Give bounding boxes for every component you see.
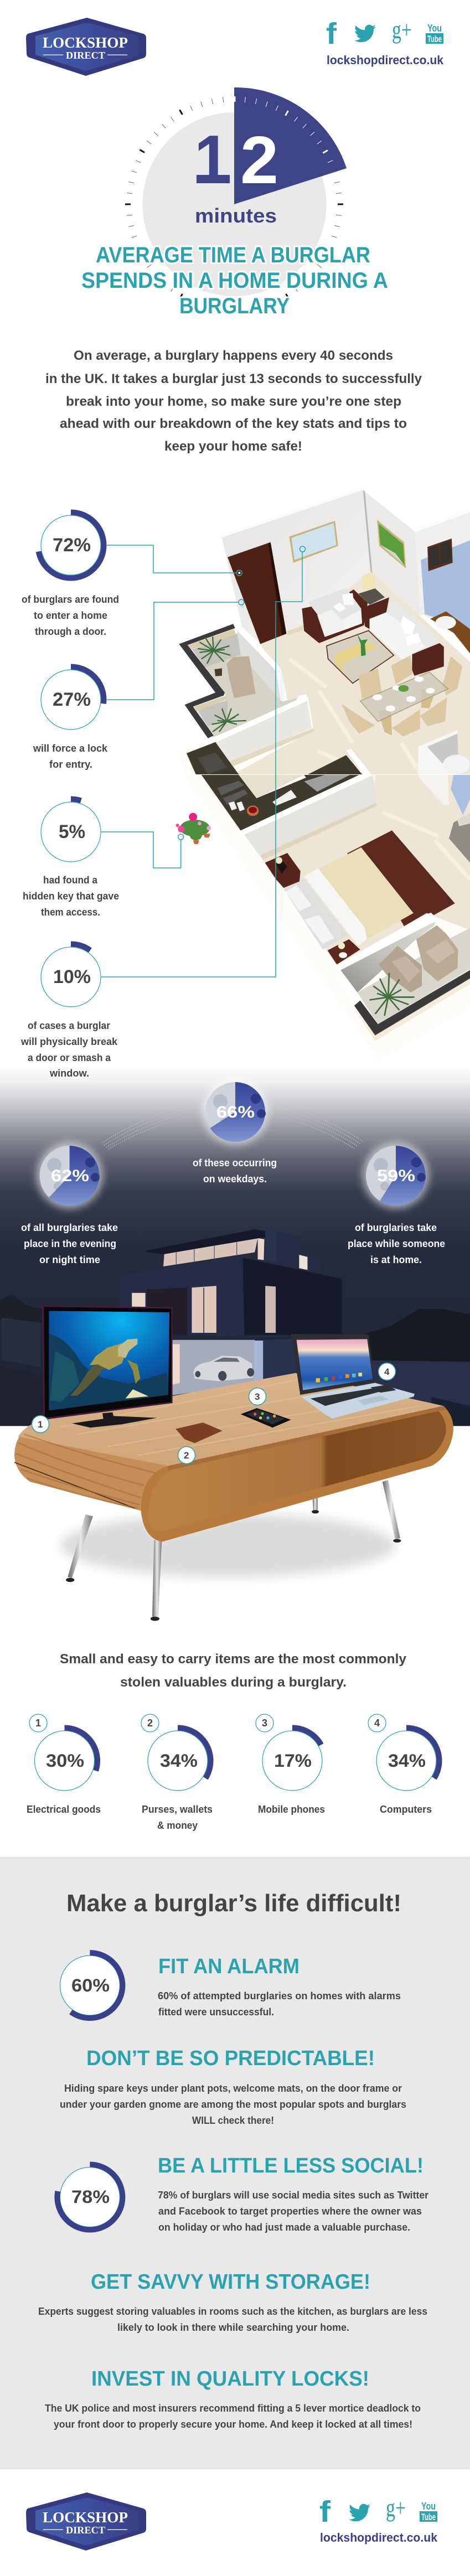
tip: fit an alarm: 60% of attempted burglaries on homes with alarms xyxy=(158,1990,401,2001)
tip: don't be so predictable: under your garden gnome are among the most popular spots and burglars xyxy=(60,2099,406,2110)
tip: be less social: 78% xyxy=(71,2187,110,2207)
stat: 10%: a door or smash a xyxy=(28,1052,111,1063)
bathroom xyxy=(418,611,470,774)
tip: be less social: on holiday or who had just made a valuable purchase. xyxy=(158,2222,410,2233)
sofas and lamp xyxy=(302,573,444,676)
valuables heading: stolen valuables during a burglary. xyxy=(120,1675,347,1690)
stat: 5%: had found a xyxy=(43,875,98,886)
website url: lockshopdirect.co.uk xyxy=(327,53,444,67)
tip: don't be so predictable: DON’T BE SO PREDICTABLE! xyxy=(86,2047,375,2070)
tip: storage: likely to look in there while searching your home. xyxy=(117,2322,349,2333)
door xyxy=(228,542,286,644)
laptop xyxy=(291,1334,415,1419)
panel: tips xyxy=(0,1857,470,2469)
number 12: 1 xyxy=(194,122,230,198)
item markers on table: 4 xyxy=(384,1367,390,1377)
table legs xyxy=(66,1480,401,1621)
tip: quality locks: your front door to properly secure your home. And keep it locked at all times! xyxy=(54,2419,412,2430)
stat: computers 34%: Computers xyxy=(380,1804,432,1815)
stat: 59% moon: of burglaries take xyxy=(355,1222,437,1233)
stat: mobile phones 17% xyxy=(256,1714,326,1815)
stat: 10%: will physically break xyxy=(20,1036,118,1047)
tv xyxy=(42,1305,173,1427)
illustration: apartment floor plan xyxy=(176,486,470,1061)
tip: quality locks: The UK police and most insurers recommend fitting a 5 lever mortice deadlock to xyxy=(45,2403,421,2414)
stat: 72% xyxy=(22,513,119,637)
intro paragraph: On average, a burglary happens every 40 seconds xyxy=(74,348,393,363)
stat: 5%: hidden key that gave xyxy=(23,891,119,902)
stat: 72%: to enter a home xyxy=(34,610,107,621)
stat: 59% moon: 59% xyxy=(377,1167,415,1185)
table body xyxy=(14,1373,453,1542)
bathroom corner and tv unit xyxy=(419,775,470,863)
title: BURGLARY xyxy=(179,294,290,318)
tip: fit an alarm: 60% xyxy=(71,1975,110,1995)
stat: 66% moon: on weekdays. xyxy=(203,1173,267,1184)
tip: storage: Experts suggest storing valuables in rooms such as the kitchen, as burglars are less xyxy=(38,2306,427,2317)
walls xyxy=(214,486,470,644)
tip: be less social: 78% of burglars will use social media sites such as Twitter xyxy=(158,2190,428,2201)
stat: 59% moon: is at home. xyxy=(370,1254,422,1265)
header logo xyxy=(26,18,146,76)
number 12: 2 xyxy=(240,122,278,198)
icon: youtube: You xyxy=(421,2501,436,2512)
clock graphic: 12 minutes xyxy=(125,87,347,299)
stat: electrical goods 30% xyxy=(27,1714,101,1815)
stat: 62% moon: place in the evening xyxy=(24,1238,116,1249)
item markers on table: 2 xyxy=(184,1450,189,1461)
stat: purses 34%: 34% xyxy=(160,1751,198,1771)
stat: 59% moon: place while someone xyxy=(348,1238,445,1249)
item markers on table: 1 xyxy=(38,1419,43,1430)
stat: electrical goods 30%: Electrical goods xyxy=(27,1804,101,1815)
icon: twitter xyxy=(349,2504,370,2521)
armchairs xyxy=(416,925,458,981)
lower half of plan xyxy=(176,775,470,1061)
stat: 5% xyxy=(23,799,119,918)
intro paragraph xyxy=(45,348,422,454)
icon: facebook: f xyxy=(326,17,337,50)
stat: mobile phones 17%: 17% xyxy=(274,1751,312,1771)
stat: 62% moon xyxy=(21,1142,118,1265)
house illustration xyxy=(0,1228,470,1426)
connector lines from stats to plan xyxy=(101,545,306,977)
stat: 66% moon: 66% xyxy=(216,1103,255,1121)
tip: be less social: BE A LITTLE LESS SOCIAL! xyxy=(158,2154,423,2177)
stat: 5%: 5% xyxy=(59,821,85,842)
stat: 72%: 72% xyxy=(53,535,91,556)
stat: mobile phones 17%: 3 xyxy=(262,1718,267,1729)
balconies xyxy=(179,624,298,738)
valuables heading xyxy=(60,1652,407,1690)
stat: 66% moon: of these occurring xyxy=(193,1157,277,1168)
icon: youtube: Tube xyxy=(427,34,442,44)
kitchen wall and counter xyxy=(187,695,371,774)
icon: facebook: f xyxy=(319,2495,331,2528)
tip: storage: GET SAVVY WITH STORAGE! xyxy=(91,2270,370,2294)
header logo: DIRECT xyxy=(66,50,105,61)
stat: 72%: of burglars are found xyxy=(22,594,119,605)
icon: twitter xyxy=(354,25,376,42)
title: AVERAGE TIME A BURGLAR xyxy=(96,243,370,267)
stat: 72%: through a door. xyxy=(35,626,106,637)
title xyxy=(81,243,388,318)
illustration: table with valuables xyxy=(14,1305,453,1621)
bedroom xyxy=(265,830,455,964)
arcs of dots xyxy=(102,1106,363,1149)
tip: be less social: and Facebook to target properties where the owner was xyxy=(158,2206,422,2217)
stat: purses 34% xyxy=(141,1714,213,1831)
tip: quality locks: INVEST IN QUALITY LOCKS! xyxy=(91,2367,369,2391)
kitchen xyxy=(202,775,377,860)
panel: night scene xyxy=(0,1065,470,1426)
coffee table xyxy=(327,630,394,683)
stat: 59% moon xyxy=(348,1142,445,1265)
dining set xyxy=(342,655,462,737)
icon: google plus: g+ xyxy=(386,2494,406,2522)
header logo: LOCKSHOP xyxy=(43,34,128,51)
tip: fit an alarm xyxy=(57,1953,401,2018)
wall pictures xyxy=(289,520,406,568)
valuables heading: Small and easy to carry items are the most commonly xyxy=(60,1652,407,1667)
header social icons xyxy=(326,15,443,50)
stat: 10%: window. xyxy=(49,1068,89,1079)
stat: mobile phones 17%: Mobile phones xyxy=(258,1804,325,1815)
icon: youtube xyxy=(426,23,443,44)
icon: google plus: g+ xyxy=(392,15,412,44)
upper half of plan xyxy=(177,486,470,774)
wallet xyxy=(175,1423,223,1443)
stat: 10% xyxy=(20,944,118,1079)
item markers on table xyxy=(32,1363,395,1463)
stat: 27% xyxy=(33,666,108,770)
floor shadow xyxy=(60,1513,396,1577)
lower balcony xyxy=(337,913,470,1041)
number 12 xyxy=(194,122,278,198)
tip: be less social xyxy=(57,2154,428,2233)
icon: youtube: You xyxy=(427,23,442,34)
stat: 5%: them access. xyxy=(41,907,100,918)
title: SPENDS IN A HOME DURING A xyxy=(81,268,388,293)
plant xyxy=(370,973,414,1016)
tip: don't be so predictable: Hiding spare keys under plant pots, welcome mats, on the door frame or xyxy=(64,2083,402,2094)
minutes label: minutes xyxy=(195,204,277,227)
stat: 62% moon: 62% xyxy=(51,1167,89,1185)
footer website url: lockshopdirect.co.uk xyxy=(320,2531,438,2544)
phone xyxy=(241,1408,291,1427)
intro paragraph: keep your home safe! xyxy=(164,439,302,454)
stat: computers 34%: 4 xyxy=(374,1718,380,1729)
stat: 10%: of cases a burglar xyxy=(28,1020,110,1031)
tip: fit an alarm: FIT AN ALARM xyxy=(158,1955,299,1978)
stat: purses 34%: Purses, wallets xyxy=(142,1804,213,1815)
stat: 27%: for entry. xyxy=(49,759,92,770)
stat: computers 34% xyxy=(368,1714,440,1815)
tips heading: Make a burglar’s life difficult! xyxy=(66,1890,401,1917)
tip: don't be so predictable xyxy=(60,2047,406,2126)
intro paragraph: break into your home, so make sure you’re one step xyxy=(66,394,401,409)
tip: don't be so predictable: WILL check there! xyxy=(192,2115,274,2126)
balcony plants xyxy=(198,637,246,732)
stat: purses 34%: & money xyxy=(157,1820,198,1831)
intro paragraph: ahead with our breakdown of the key stats and tips to xyxy=(60,416,407,431)
footer logo: DIRECT xyxy=(66,2525,105,2536)
flower pots xyxy=(176,813,211,844)
footer logo xyxy=(26,2492,146,2551)
stat: 10%: 10% xyxy=(53,966,91,987)
stat: 62% moon: or night time xyxy=(39,1254,100,1265)
intro paragraph: in the UK. It takes a burglar just 13 seconds to successfully xyxy=(45,371,422,386)
tip: storage xyxy=(38,2270,427,2333)
floor xyxy=(233,571,470,774)
balcony armchair xyxy=(226,656,256,698)
tip: quality locks xyxy=(45,2367,421,2430)
stat: 27%: 27% xyxy=(53,689,91,710)
footer social icons xyxy=(319,2494,437,2528)
footer logo: LOCKSHOP xyxy=(43,2509,128,2526)
icon: youtube: Tube xyxy=(421,2512,436,2522)
stat: 66% moon xyxy=(193,1079,277,1184)
stat: purses 34%: 2 xyxy=(147,1718,153,1729)
stat: electrical goods 30%: 30% xyxy=(46,1751,84,1771)
stat: electrical goods 30%: 1 xyxy=(35,1718,41,1729)
car xyxy=(193,1356,253,1381)
stat: computers 34%: 34% xyxy=(388,1751,426,1771)
icon: youtube xyxy=(420,2501,437,2522)
stat: 27%: will force a lock xyxy=(33,743,108,754)
stat: 62% moon: of all burglaries take xyxy=(21,1222,118,1233)
item markers on table: 3 xyxy=(255,1392,260,1402)
tip: fit an alarm: fitted were unsuccessful. xyxy=(158,2006,274,2018)
